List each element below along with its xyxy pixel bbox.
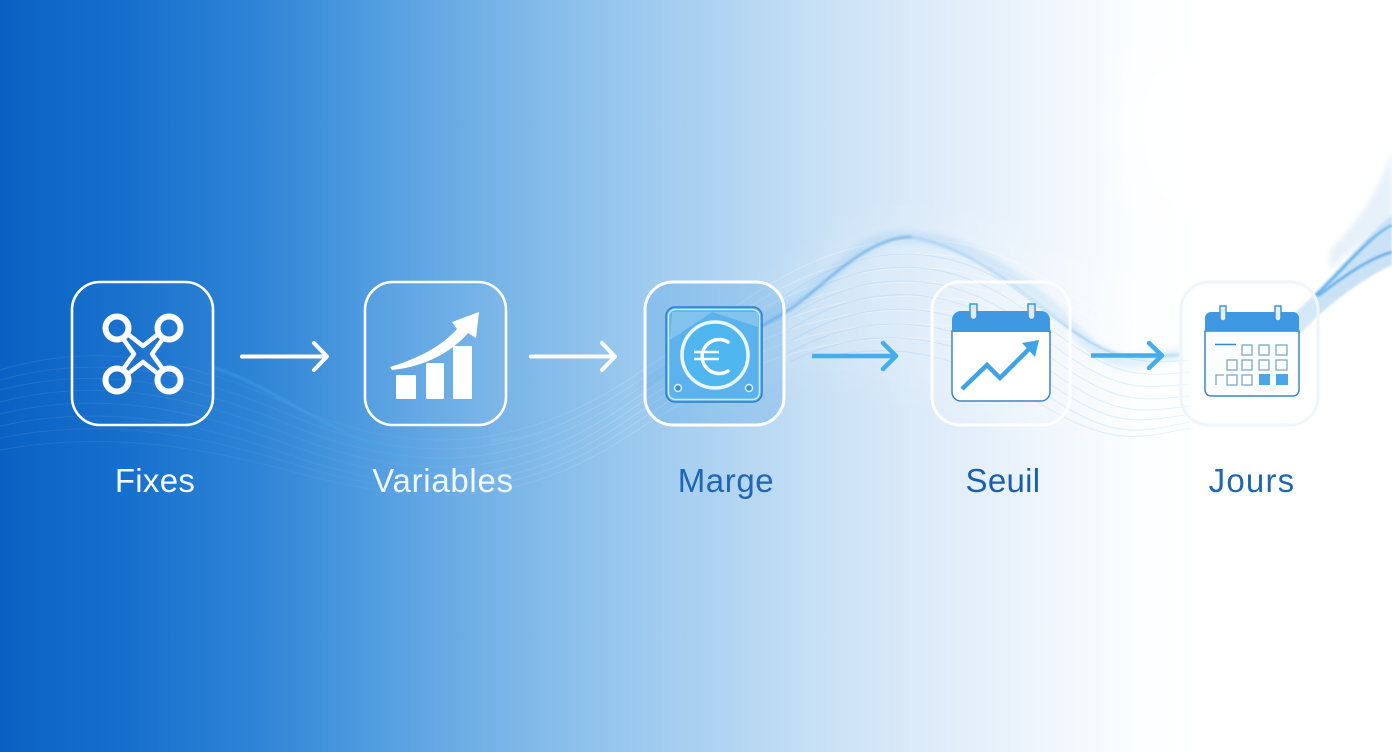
icon: calendar with trend [952, 304, 1050, 401]
icon card: Variables [365, 282, 506, 425]
icon: calendar with days [1205, 306, 1299, 396]
arrow 2 [531, 343, 615, 370]
icon: euro safe [666, 307, 762, 402]
icon: rising bars with arrow [390, 312, 479, 399]
label: Jours: Jours [1209, 462, 1295, 499]
arrow 3 [812, 343, 896, 369]
label: Marge: Marge [678, 462, 774, 499]
icon card: Jours [1181, 282, 1318, 425]
icon card: Seuil [932, 282, 1070, 425]
label: Fixes: Fixes [115, 462, 195, 499]
arrow 1 [242, 343, 327, 370]
icon card: Marge [645, 282, 784, 425]
arrow 4 [1091, 343, 1162, 368]
label: Variables: Variables [372, 462, 514, 499]
icon: four-node cross [106, 316, 180, 392]
label: Seuil: Seuil [966, 462, 1040, 499]
icon card: Fixes [72, 282, 213, 425]
